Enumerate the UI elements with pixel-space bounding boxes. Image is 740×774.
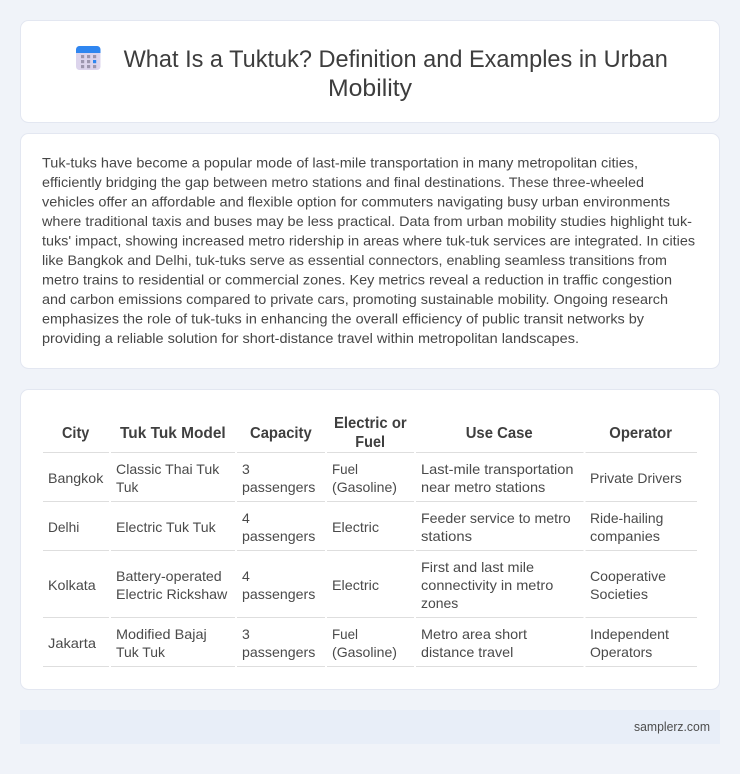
table row: Jakarta: Fuel — [332, 626, 358, 642]
table row: Delhi: Delhi — [48, 519, 79, 535]
text block: description paragraph: Tuk-tuks have become a popular mode of last-mile transportation in many metropolitan cities, — [42, 154, 638, 170]
table header row: Use Case — [466, 425, 533, 442]
table header row — [62, 415, 672, 451]
table row: Kolkata: Electric — [332, 577, 379, 593]
text block: description paragraph: like Bangkok and Delhi, tuk-tuks serve as essential connectors, enabling seamless transitions from — [42, 252, 667, 268]
table row: Jakarta: Tuk Tuk — [116, 644, 166, 660]
table row: Delhi: Ride-hailing — [590, 510, 663, 526]
table row: Jakarta — [48, 626, 669, 660]
table row: Kolkata: Battery-operated — [116, 568, 222, 584]
table row: Bangkok: Private Drivers — [590, 470, 682, 486]
table row: Delhi: Electric — [332, 519, 379, 535]
table header row: Operator — [609, 425, 672, 442]
table header row: Capacity — [250, 425, 312, 442]
panel: description — [20, 134, 720, 368]
text block: description paragraph — [41, 154, 695, 346]
table row: Jakarta: Metro area short — [421, 626, 527, 642]
title — [124, 46, 668, 102]
table row: Kolkata: passengers — [242, 586, 315, 602]
table row: Jakarta: Modified Bajaj — [116, 626, 207, 642]
table row: Bangkok: passengers — [242, 479, 315, 495]
table row: Kolkata: 4 — [242, 568, 250, 584]
text block: description paragraph: metro trains to residential or commercial zones. Key metrics reveal a reduction in traffic congestion — [42, 272, 672, 288]
table row: Delhi: 4 — [242, 510, 250, 526]
table header row: City — [62, 425, 89, 442]
table row: Delhi: companies — [590, 528, 660, 544]
table header row: Tuk Tuk Model — [120, 425, 226, 442]
table row: Jakarta: Independent — [590, 626, 669, 642]
table row: Kolkata: Electric Rickshaw — [116, 586, 228, 602]
text block: description paragraph: tuks' impact, showing increased metro ridership in areas where tuk-tuk services are integrated. In cities — [42, 232, 695, 248]
table row: Jakarta: (Gasoline) — [332, 644, 397, 660]
table row: Kolkata: Societies — [590, 586, 648, 602]
table row: Jakarta: Operators — [590, 644, 652, 660]
table row: Kolkata: First and last mile — [421, 559, 534, 575]
footer credit: samplerz.com — [634, 720, 710, 734]
text block: description paragraph: efficiently bridging the gap between metro stations and final destinations. These three-wheeled — [42, 174, 644, 190]
table row: Bangkok: Last-mile transportation — [421, 461, 574, 477]
table row: Bangkok: 3 — [242, 461, 250, 477]
table row: Bangkok: Fuel — [332, 461, 358, 477]
panel: comparison table — [20, 390, 720, 690]
table row: Delhi — [48, 510, 663, 544]
table row: Bangkok — [48, 461, 682, 495]
table row: Jakarta: distance travel — [421, 644, 513, 660]
text block: description paragraph: emphasizes the role of tuk-tuks in enhancing the overall efficiency of public transit networks by — [42, 310, 644, 326]
table row: Delhi: Electric Tuk Tuk — [116, 519, 217, 535]
text block: description paragraph: providing a reliable solution for short-distance travel within metropolitan landscapes. — [42, 330, 579, 346]
table row: Kolkata: Cooperative — [590, 568, 666, 584]
table row: Jakarta: 3 — [242, 626, 250, 642]
table row: Kolkata — [48, 559, 666, 611]
icon: calendar — [76, 46, 100, 70]
table row: Bangkok: Bangkok — [48, 470, 104, 486]
footer bar — [20, 710, 720, 744]
text block: description paragraph: where traditional taxis and buses may be less practical. Data from urban mobility studies highlight tuk- — [41, 213, 692, 229]
table row: Delhi: Feeder service to metro — [421, 510, 571, 526]
panel: title card — [20, 20, 720, 122]
title: Mobility — [328, 75, 412, 102]
table row: Kolkata: connectivity in metro — [421, 577, 554, 593]
table row: Bangkok: near metro stations — [421, 479, 545, 495]
table header row: Fuel — [355, 434, 385, 451]
title: What Is a Tuktuk? Definition and Examples in Urban — [124, 46, 668, 73]
table header row: Electric or — [334, 415, 407, 432]
text block: description paragraph: and carbon emissions compared to private cars, promoting sustainable mobility. Ongoing research — [42, 291, 668, 307]
table row: Jakarta: Jakarta — [48, 635, 96, 651]
table row: Kolkata: Kolkata — [48, 577, 96, 593]
table row: Bangkok: Tuk — [116, 479, 139, 495]
table row: Delhi: stations — [421, 528, 472, 544]
table row: Kolkata: zones — [421, 595, 458, 611]
table row: Bangkok: (Gasoline) — [332, 479, 397, 495]
table row: Jakarta: passengers — [242, 644, 315, 660]
table row: Bangkok: Classic Thai Tuk — [116, 461, 220, 477]
text block: description paragraph: vehicles offer an affordable and flexible option for commuters navigating busy urban environments — [42, 194, 670, 210]
table row: Delhi: passengers — [242, 528, 315, 544]
